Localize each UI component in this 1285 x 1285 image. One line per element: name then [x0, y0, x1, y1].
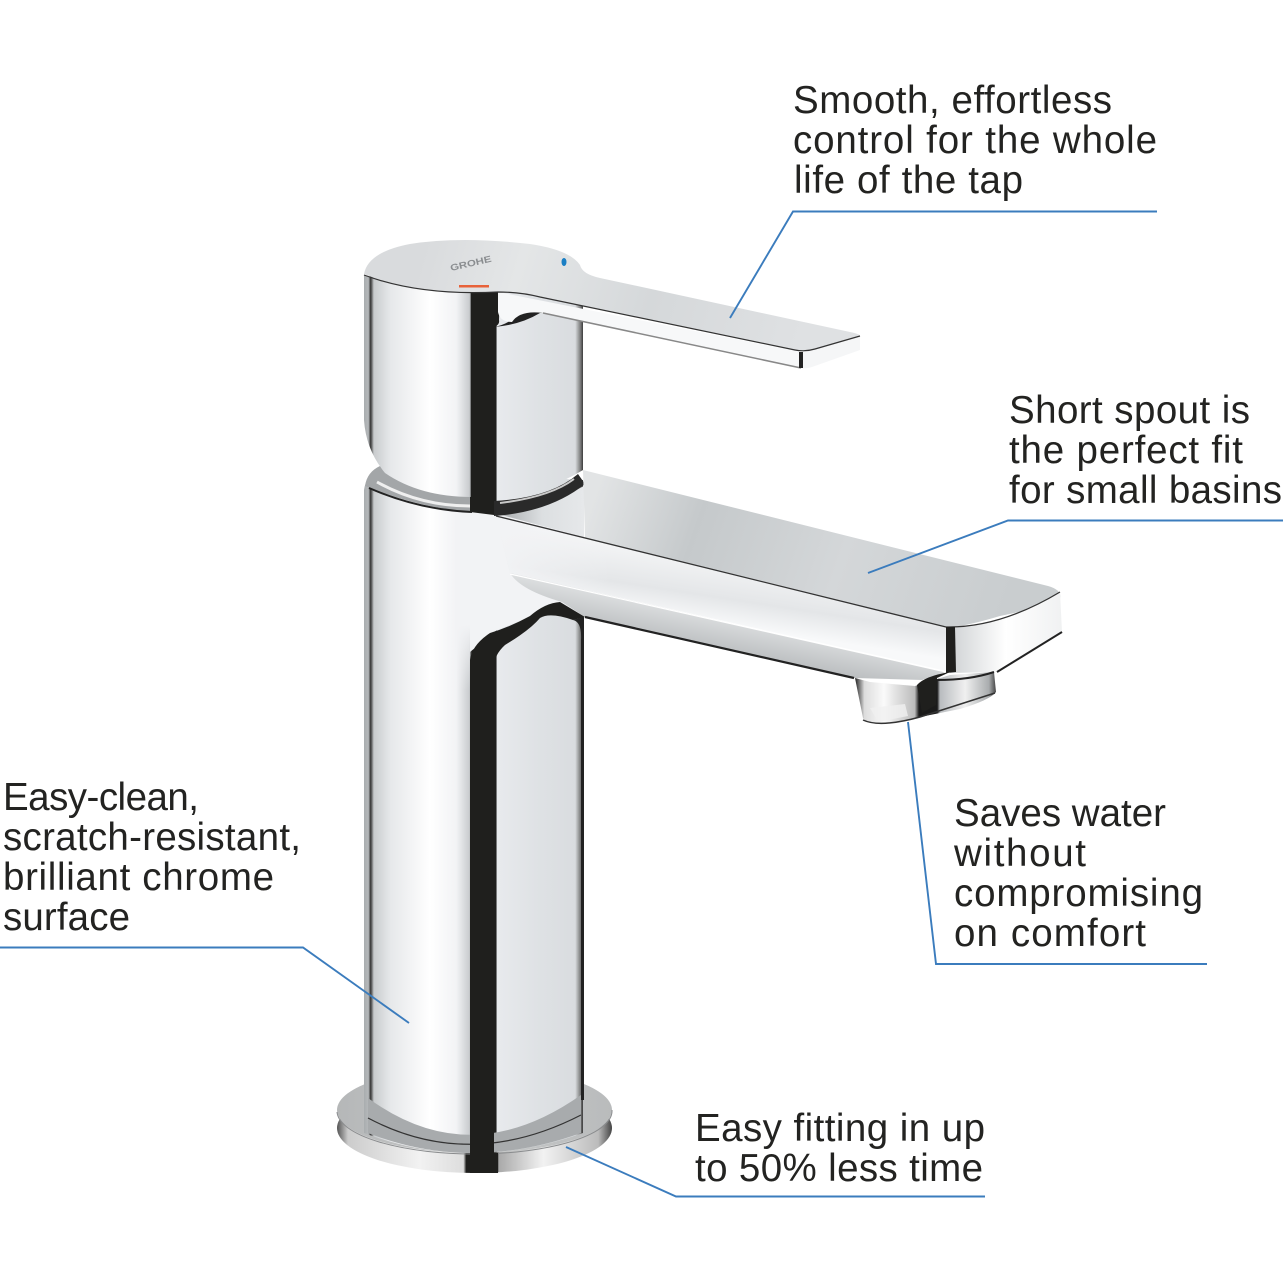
- callout: chrome surface: scratch-resistant,: [3, 816, 301, 859]
- callout: chrome surface: surface: [3, 896, 130, 939]
- logo mark on handle: GROHE: [449, 254, 492, 273]
- callout: chrome surface: Easy-clean,: [3, 776, 199, 819]
- callout: saves water: on comfort: [954, 912, 1146, 955]
- callout: saves water: without: [953, 832, 1086, 875]
- callout: short spout: the perfect fit: [1009, 429, 1243, 472]
- callout: short spout: [868, 389, 1283, 573]
- callout: handle control: control for the whole: [793, 119, 1157, 162]
- handle lever: [364, 240, 860, 368]
- callout: short spout: Short spout is: [1009, 389, 1250, 432]
- spout: [496, 470, 1062, 680]
- tap body column: [364, 466, 585, 1153]
- callout: easy fitting: to 50% less time: [695, 1147, 983, 1190]
- callout: saves water: [908, 722, 1207, 964]
- callout: handle control: life of the tap: [794, 159, 1023, 202]
- body reflection band: [470, 602, 585, 1100]
- aerator: [855, 672, 996, 724]
- callout: saves water: Saves water: [954, 792, 1166, 835]
- callout: short spout: for small basins: [1009, 469, 1282, 512]
- hot indicator: [459, 285, 489, 288]
- cold indicator: [562, 258, 566, 266]
- callout: handle control: Smooth, effortless: [793, 79, 1112, 122]
- handle cylinder: [364, 275, 583, 497]
- callout: saves water: compromising: [954, 872, 1203, 915]
- tap base plate: [337, 1067, 612, 1173]
- callout: easy fitting: Easy fitting in up: [695, 1107, 985, 1150]
- callout: chrome surface: brilliant chrome: [3, 856, 274, 899]
- callout: chrome surface: [0, 776, 409, 1023]
- illustration: chrome basin tap: [337, 240, 1062, 1173]
- callout: handle control: [730, 79, 1157, 318]
- callout: easy fitting: [566, 1107, 985, 1196]
